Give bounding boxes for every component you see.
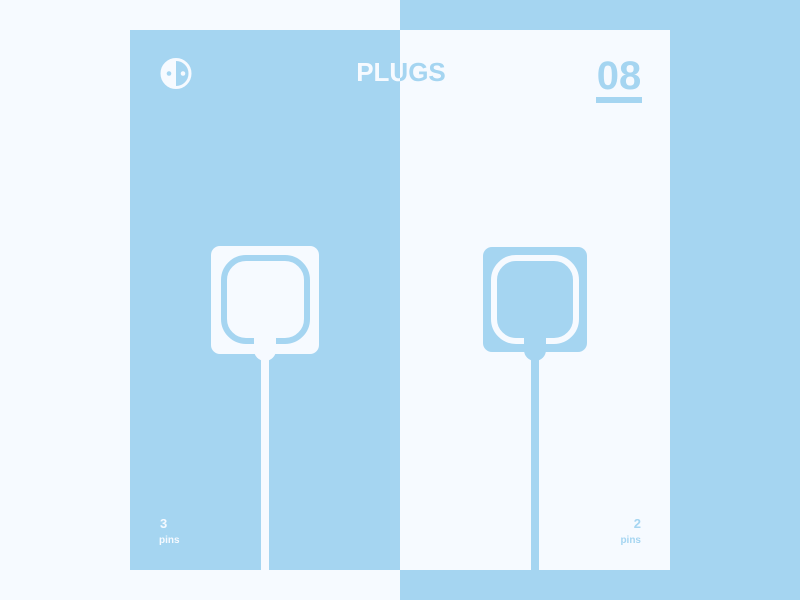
label: 3 pins: 3: [160, 516, 167, 531]
label: 3 pins: pins: [159, 535, 180, 546]
title: PLUGS: [356, 57, 446, 87]
label: 2 pins: [620, 516, 641, 546]
icon: socket logo: [162, 60, 190, 88]
title: PLUGS: [356, 57, 446, 87]
label: 2 pins: pins: [620, 535, 641, 546]
label: 3 pins: [159, 516, 180, 546]
panel: right card half: [400, 30, 670, 570]
panel: left card half: [130, 30, 400, 570]
number 08: 08: [597, 54, 641, 98]
plug: 3 pins: [211, 246, 319, 570]
label: 2 pins: 2: [634, 516, 641, 531]
title: [358, 62, 445, 82]
plug: 2 pins: [483, 247, 587, 570]
